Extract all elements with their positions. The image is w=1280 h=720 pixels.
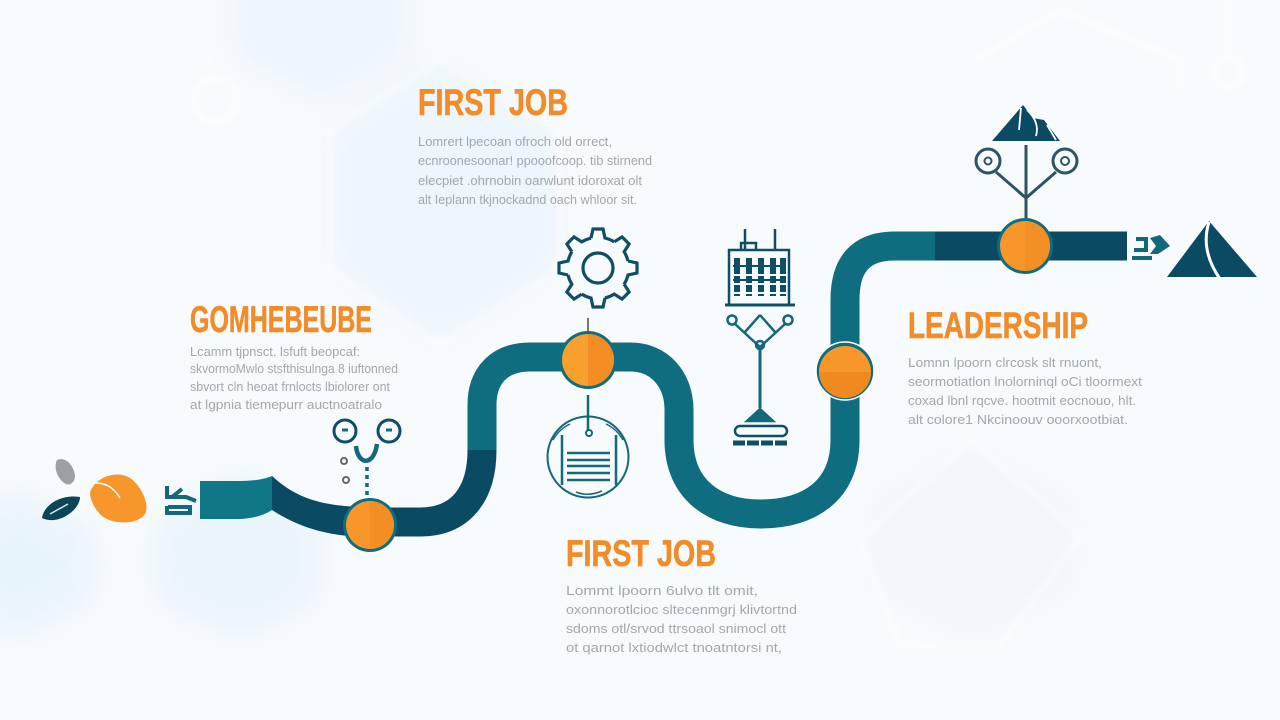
- text block: leadership: coxad lbnl rqcve. hootmit eocnouo, hlt.: [908, 393, 1136, 408]
- icon: first node faces: [334, 420, 400, 496]
- node 2: [559, 331, 617, 389]
- icon: leaves: [42, 459, 147, 522]
- icon: building: [725, 229, 795, 305]
- icon: document in circle: [548, 318, 628, 498]
- heading: first job bottom: FIRST JOB: [566, 533, 716, 574]
- node 4: [997, 218, 1053, 274]
- text block: first job bottom: ot qarnot lxtiodwlct tnoatntorsi nt,: [566, 640, 782, 655]
- icon: gear: [559, 229, 637, 307]
- text block: leadership: Lomnn lpoorn clrcosk slt rnuont,: [908, 355, 1102, 370]
- text block: first job top: elecpiet .ohrnobin oarwlunt idoroxat olt: [418, 173, 642, 188]
- career path band: [200, 246, 1127, 537]
- text block: first job top: alt Ieplann tkjnockadnd oach whloor sit.: [418, 192, 637, 207]
- text block: leadership: alt colore1 Nkcinoouv ooorxootbiat.: [908, 412, 1128, 427]
- heading: left step: GOMHEBEUBE: [190, 299, 372, 340]
- icon: branch with circles: [976, 145, 1077, 220]
- heading: leadership: LEADERSHIP: [908, 305, 1088, 346]
- text block: leadership: seormotiatlon lnolorninql oCi tloormext: [908, 374, 1142, 389]
- text block: leadership: [908, 355, 1142, 427]
- text block: first job top: ecnroonesoonar! ppooofcoop. tib stirnend: [418, 153, 652, 168]
- text block: first job bottom: [566, 583, 797, 655]
- text block: left step: skvormoMwlo stsfthisulnga 8 iuftonned: [190, 361, 398, 376]
- text block: left step: sbvort cln heoat frnlocts lbiolorer ont: [190, 379, 390, 394]
- text block: left step: at lgpnia tiemepurr auctnoatralo: [190, 397, 382, 412]
- icon: hanging scale: [728, 315, 792, 443]
- icon: mountain goal: [1167, 221, 1257, 279]
- dark lead-in segment: [272, 476, 370, 537]
- icon: mountain top: [992, 105, 1060, 141]
- node 1: [343, 498, 397, 552]
- text block: first job bottom: oxonnorotlcioc sltecenmgrj klivtortnd: [566, 602, 797, 617]
- text block: first job top: Lomrert lpecoan ofroch old orrect,: [418, 134, 612, 149]
- text block: first job top: [418, 134, 652, 207]
- icon: connector glyph left: [167, 486, 196, 513]
- icon: connector glyph right: [1132, 235, 1170, 258]
- path start segment: [200, 476, 272, 519]
- node 3: [816, 342, 874, 400]
- text block: left step: Lcamm tjpnsct. lsfuft beopcaf:: [190, 344, 360, 359]
- heading: first job top: FIRST JOB: [418, 82, 568, 123]
- text block: first job bottom: sdoms otl/srvod ttrsoaol snimocl ott: [566, 621, 786, 636]
- text block: first job bottom: Lommt lpoorn 6ulvo tlt omit,: [566, 583, 758, 598]
- text block: left step: [190, 344, 398, 412]
